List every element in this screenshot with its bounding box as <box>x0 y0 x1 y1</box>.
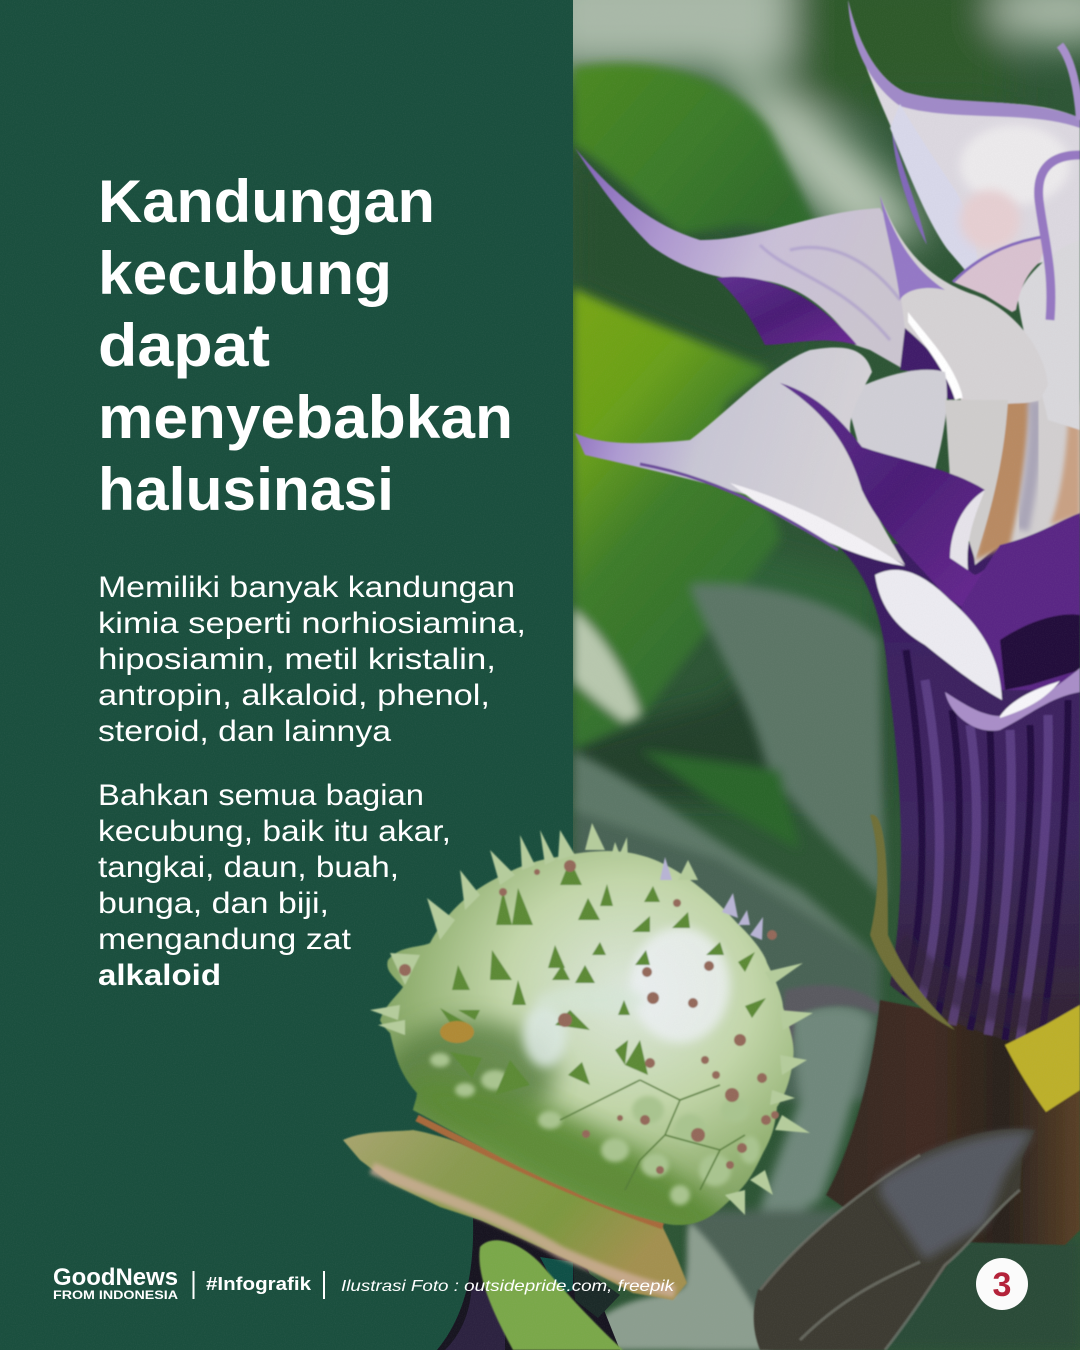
pink spot <box>947 401 975 429</box>
photo: sepal under the fruit <box>343 1118 687 1300</box>
purple underside <box>716 277 857 345</box>
fruit body <box>380 851 794 1225</box>
upper-left petal <box>575 148 906 370</box>
photo credit: Ilustrasi Foto : outsidepride.com, freepik <box>341 1278 675 1295</box>
mauve inner petal <box>953 236 1048 312</box>
edge spikes <box>370 823 813 1215</box>
white curled petal <box>875 570 1002 700</box>
middle petal <box>880 195 1048 405</box>
photo: spiky fruit <box>370 823 813 1271</box>
title: dapat <box>98 312 270 379</box>
tube rim <box>945 668 1080 731</box>
dark green spikes <box>440 860 766 1095</box>
flower tube <box>840 540 1080 1060</box>
pale right inner petal <box>1018 240 1080 430</box>
brown spike tips <box>399 860 779 1174</box>
text block: chemical content: steroid, dan lainnya <box>98 715 391 748</box>
text block: alkaloid in all parts: tangkai, daun, buah, <box>98 851 399 884</box>
calyx tooth <box>870 815 955 1030</box>
text block: chemical content: Memiliki banyak kandungan <box>98 571 515 604</box>
pale small leaf <box>573 610 640 722</box>
photo: seed bud bottom right <box>754 1129 1035 1350</box>
text block: chemical content: antropin, alkaloid, phenol, <box>98 679 490 712</box>
lower-left petal <box>575 347 905 565</box>
panel: photo area below the fruit <box>437 1218 620 1350</box>
back throat <box>960 300 1080 565</box>
text block: alkaloid in all parts: kecubung, baik itu akar, <box>98 815 451 848</box>
page number badge: 3 <box>993 1266 1011 1304</box>
title: menyebabkan <box>98 384 513 451</box>
text block: chemical content: kimia seperti norhiosiamina, <box>98 607 526 640</box>
grey leaf right <box>690 584 885 900</box>
logo: GoodNews from Indonesia: GoodNews <box>53 1264 178 1291</box>
text block: alkaloid in all parts: alkaloid <box>98 959 221 992</box>
text block: alkaloid in all parts <box>98 779 451 992</box>
logo: GoodNews from Indonesia: FROM INDONESIA <box>53 1288 178 1302</box>
curled purple filament <box>1039 155 1080 320</box>
fruit shading and highlights <box>392 923 761 1226</box>
front petal back layer <box>845 370 947 470</box>
footer <box>53 1264 675 1302</box>
text block: alkaloid in all parts: mengandung zat <box>98 923 352 956</box>
grey curled petal behind fruit <box>784 985 879 1042</box>
title: Kandungan <box>98 168 435 235</box>
top petal <box>848 0 1080 280</box>
panel: dark green text background <box>0 0 573 1350</box>
text block: alkaloid in all parts: Bahkan semua bagian <box>98 779 424 812</box>
photo: blurred foliage background <box>540 0 1080 1350</box>
dark purple petal <box>780 383 1003 611</box>
photo: flower <box>575 0 1080 1245</box>
insect on fruit <box>440 1021 474 1043</box>
text block: alkaloid in all parts: bunga, dan biji, <box>98 887 329 920</box>
hashtag: #Infografik <box>206 1274 312 1294</box>
page number badge <box>976 1258 1028 1310</box>
photo: bottom green leaf <box>479 1240 623 1350</box>
text block: chemical content <box>98 571 526 748</box>
title <box>98 168 513 523</box>
top green leaf <box>573 64 820 235</box>
title: halusinasi <box>98 456 394 523</box>
right dark purple petal <box>960 513 1080 690</box>
yellow calyx <box>1005 1005 1080 1112</box>
title: kecubung <box>98 240 392 307</box>
lower grey-green leaf <box>573 752 880 1010</box>
flower stem <box>826 1000 1080 1245</box>
lime leaf <box>573 288 780 750</box>
text block: chemical content: hiposiamin, metil kristalin, <box>98 643 496 676</box>
